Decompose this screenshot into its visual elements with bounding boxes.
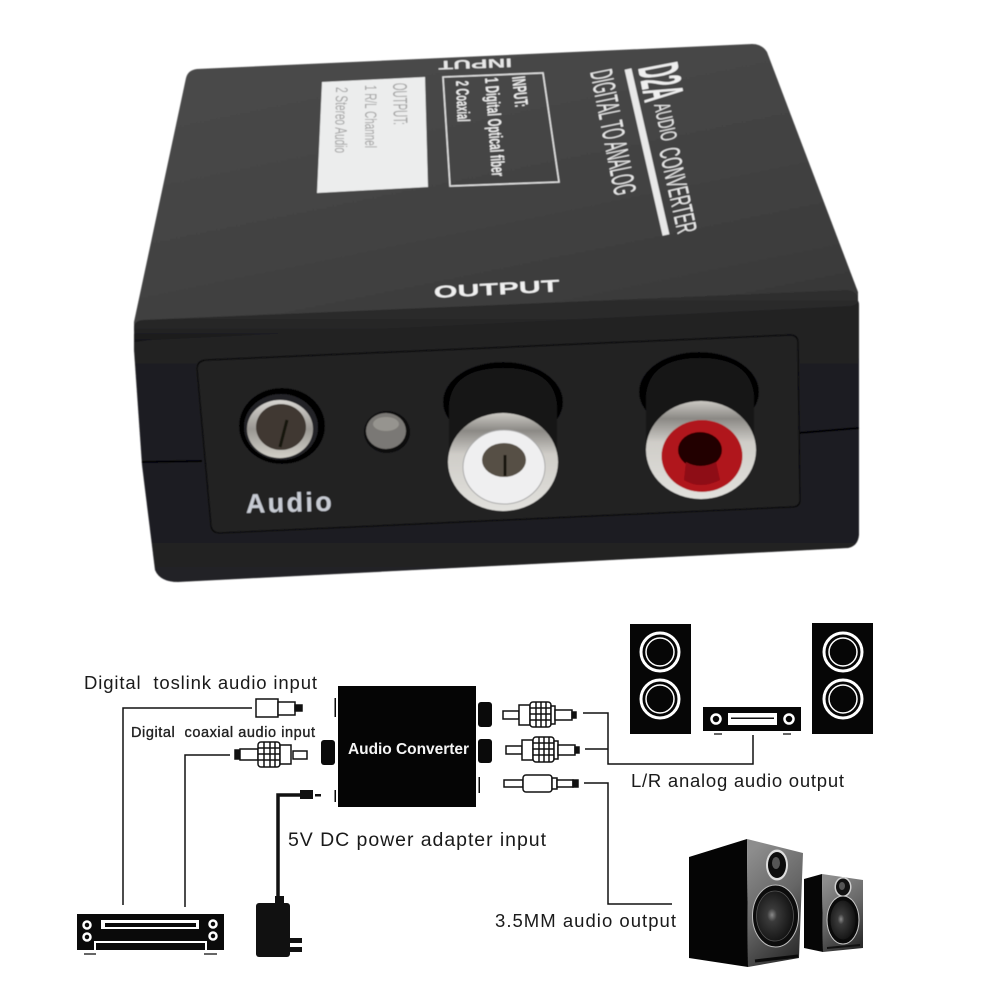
amplifier icon (703, 707, 801, 734)
large bookshelf speaker (689, 839, 803, 967)
text: AUDIO CONVERTER (649, 101, 702, 236)
front top edge (134, 290, 858, 342)
front panel plate (197, 335, 800, 533)
front face of device (134, 298, 859, 582)
input info box: 1 Digital Optical fiber (480, 77, 508, 177)
right RCA plug (506, 737, 579, 762)
coaxial cable and plug (185, 742, 307, 907)
3.5mm plug (504, 775, 578, 792)
right speaker icon (812, 623, 873, 734)
case seam right (798, 428, 859, 433)
panel: device photo: D2A (625, 58, 696, 106)
white output label: OUTPUT: (388, 83, 411, 125)
indicator LED (364, 411, 410, 453)
small bookshelf speaker (804, 874, 863, 952)
white output label (317, 77, 428, 193)
white output label: 1 R/L Channel (361, 85, 380, 148)
label: Digital coaxial audio input: Digital coaxial audio input (131, 725, 315, 741)
label: Digital toslink audio input: Digital toslink audio input (84, 672, 317, 693)
case seam left (142, 461, 202, 462)
text: AUDIO CONVERTER: AUDIO (649, 101, 682, 143)
power cable and plug (278, 790, 321, 898)
panel: device photo: CONVERTER (652, 145, 702, 236)
panel: connection diagram (77, 623, 873, 967)
left RCA plug (503, 702, 576, 727)
3.5mm output cable (584, 783, 672, 904)
left speaker icon (630, 624, 691, 734)
white RCA socket (443, 362, 563, 511)
input info box (443, 73, 559, 186)
converter side ports (321, 698, 492, 802)
panel: device photo: DIGITAL TO ANALOG (583, 66, 643, 198)
input info box: INPUT: (507, 75, 531, 108)
top face of device (134, 44, 858, 340)
converter box: Audio Converter (348, 741, 469, 758)
red RCA socket (639, 352, 759, 499)
converter box (338, 686, 476, 807)
label: OUTPUT: OUTPUT (433, 276, 561, 302)
white output label: 2 Stereo Audio (331, 87, 351, 153)
power adapter (256, 896, 302, 957)
source player (77, 914, 224, 954)
label: 5V DC power adapter input: 5V DC power adapter input (288, 829, 547, 851)
input info box: 2 Coaxial (452, 80, 473, 122)
label: L/R analog audio output: L/R analog audio output (631, 770, 844, 791)
audio jack (239, 388, 325, 464)
toslink cable and plug (123, 699, 302, 905)
label: 3.5MM audio output: 3.5MM audio output (495, 910, 676, 931)
label: INPUT: INPUT (437, 56, 512, 72)
label: Audio: Audio (245, 487, 332, 519)
brand divider bar (628, 69, 666, 235)
panel: device photo (134, 44, 859, 582)
L/R output cable (583, 713, 753, 764)
